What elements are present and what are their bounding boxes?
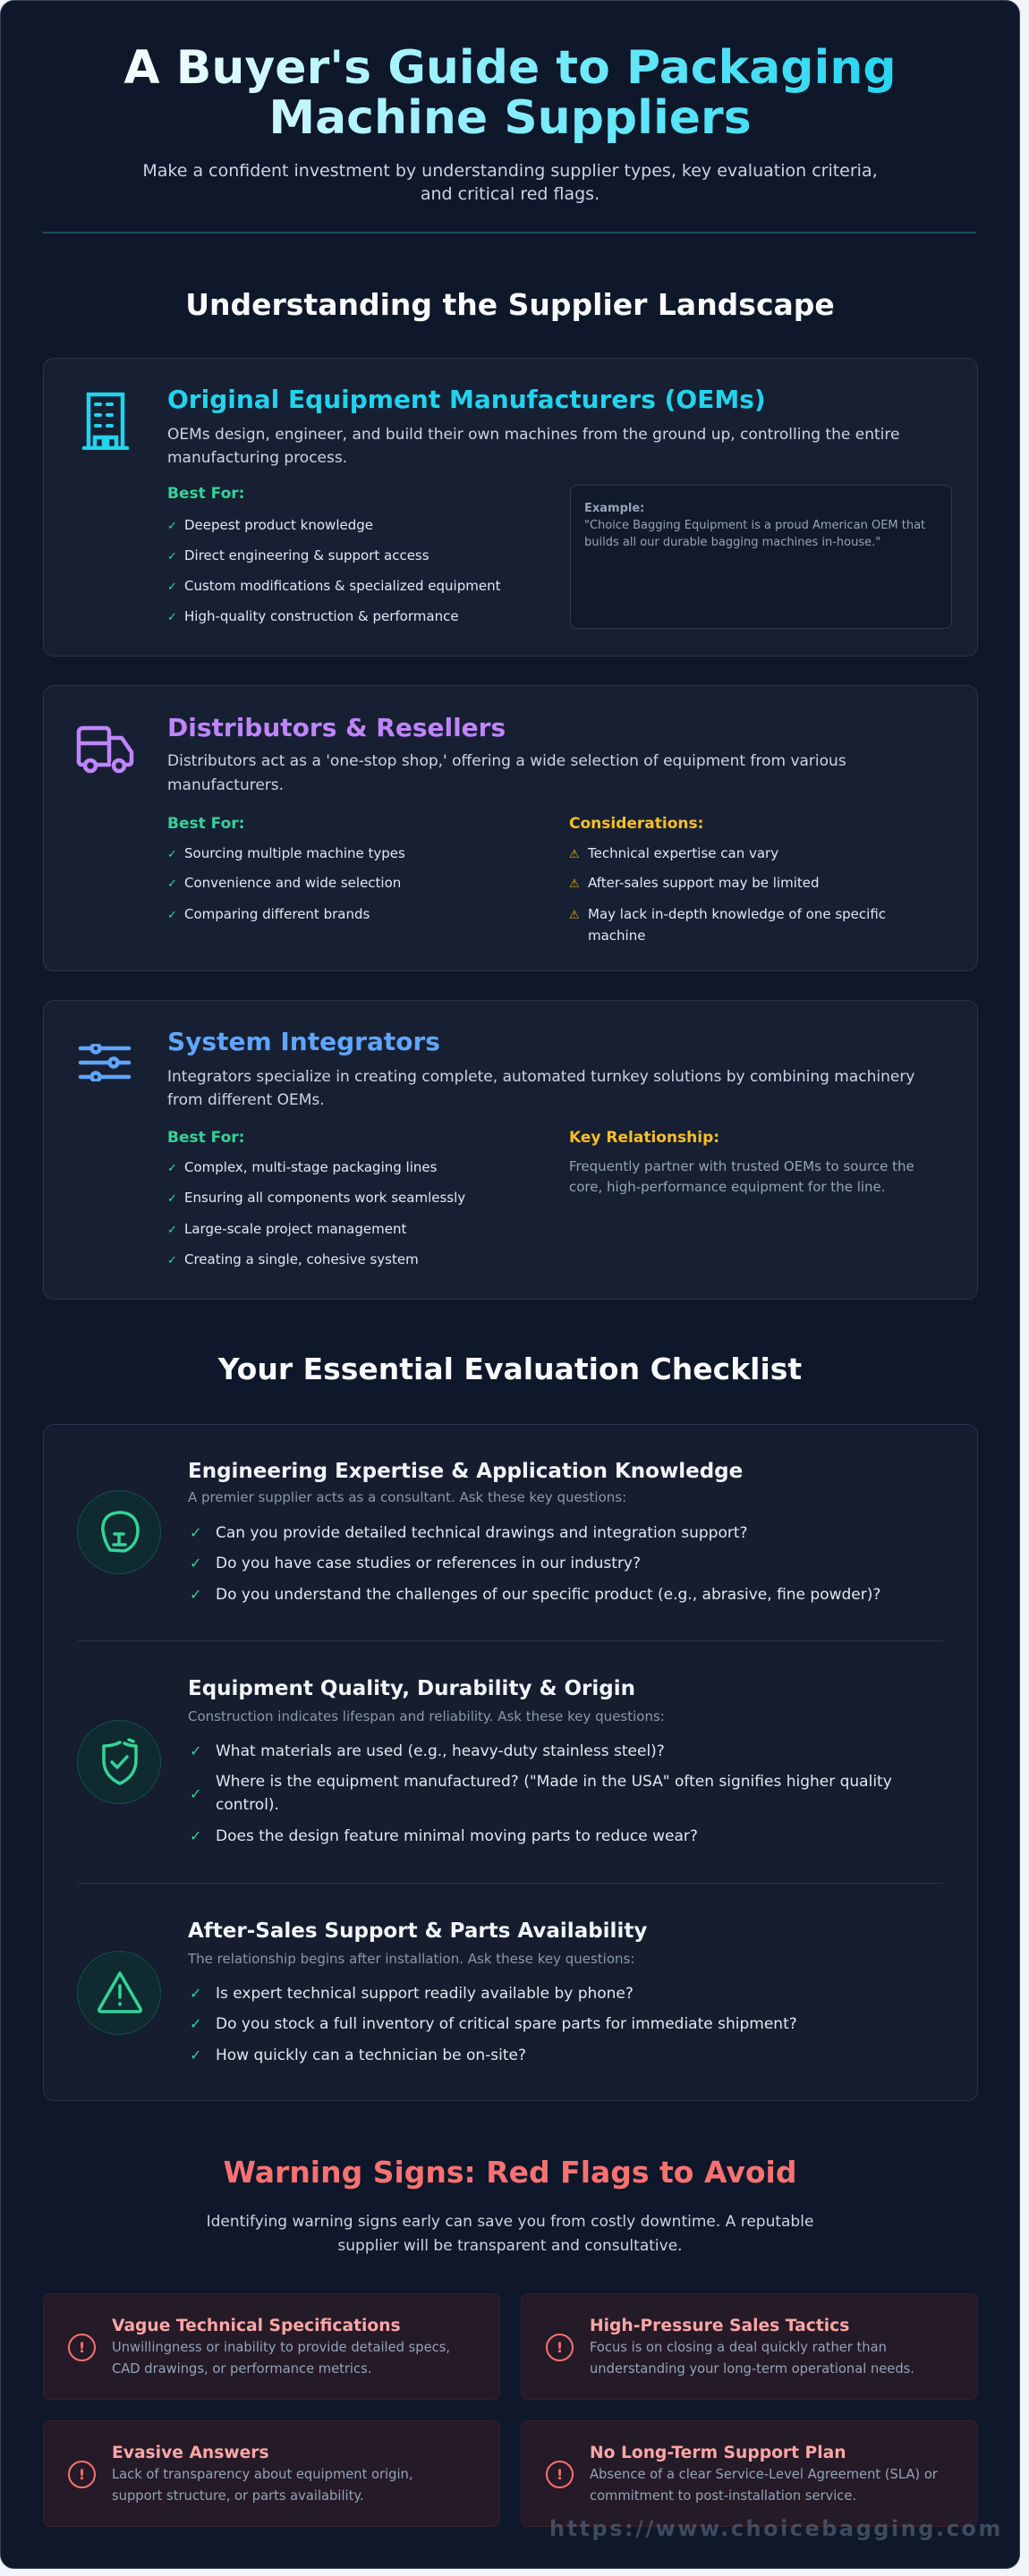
best for list: Custom modifications & specialized equipment: [184, 578, 500, 594]
best for list: High-quality construction & performance: [184, 608, 459, 624]
icon: shield check: [77, 1720, 161, 1804]
checklist item: quality: ✓: [190, 1827, 201, 1844]
icon: warning triangle: [77, 1951, 161, 2035]
best for list: ✓: [167, 1192, 177, 1206]
best for list: Direct engineering & support access: [184, 547, 429, 564]
best for list: ✓: [167, 909, 177, 922]
checklist item: quality: Construction indicates lifespan and reliability. Ask these key questions:: [188, 1708, 665, 1724]
red flag: vague specs: Unwillingness or inability to provide detailed specs,: [112, 2340, 450, 2355]
red flag: no support plan: commitment to post-installation service.: [590, 2488, 856, 2504]
best for list: ✓: [167, 848, 177, 861]
considerations list: May lack in-depth knowledge of one specific: [588, 906, 886, 922]
checklist item: engineering: ✓: [190, 1555, 201, 1572]
panel: checklist: [43, 1424, 978, 2101]
best for list: Comparing different brands: [184, 906, 370, 922]
red flag: vague specs: CAD drawings, or performance metrics.: [112, 2361, 371, 2377]
heading: supplier landscape: Understanding the Supplier Landscape: [185, 287, 835, 322]
best for list: ✓: [167, 520, 177, 533]
distributors title: Distributors & Resellers: [167, 713, 506, 742]
considerations list: machine: [588, 928, 645, 944]
OEM description: OEMs design, engineer, and build their own machines from the ground up, controlling the entire: [167, 426, 899, 444]
subtitle: Make a confident investment by understanding supplier types, key evaluation criteria,: [142, 161, 878, 181]
distributors description: [167, 752, 846, 794]
best for list: Deepest product knowledge: [184, 517, 373, 533]
red flag: evasive answers: support structure, or parts availability.: [112, 2488, 364, 2504]
best for list: Best For:: [167, 485, 244, 503]
distributors description: manufacturers.: [167, 776, 284, 794]
checklist item: engineering: A premier supplier acts as a consultant. Ask these key questions:: [188, 1489, 626, 1505]
checklist item: engineering: [77, 1460, 880, 1604]
best for list: ✓: [167, 1162, 177, 1175]
checklist item: after-sales: The relationship begins after installation. Ask these key questions:: [188, 1951, 634, 1967]
checklist item: quality: Equipment Quality, Durability & Origin: [188, 1677, 635, 1700]
best for list: [167, 485, 501, 624]
icon: building: [82, 392, 129, 450]
red flag: high pressure: High-Pressure Sales Tactics: [590, 2317, 849, 2335]
subtitle: and critical red flags.: [421, 184, 600, 204]
checklist item: after-sales: ✓: [190, 1985, 201, 2002]
checklist item: quality: What materials are used (e.g., heavy-duty stainless steel)?: [216, 1742, 665, 1760]
heading: warning signs: Warning Signs: Red Flags to Avoid: [224, 2155, 796, 2190]
key relationship: core, high-performance equipment for the line.: [569, 1179, 886, 1195]
considerations list: ⚠: [569, 877, 580, 891]
considerations list: After-sales support may be limited: [588, 875, 820, 891]
considerations list: ⚠: [569, 909, 580, 922]
OEM description: [167, 426, 899, 467]
checklist item: engineering: Do you understand the challenges of our specific product (e.g., abrasive, fine powder)?: [216, 1586, 880, 1604]
checklist item: engineering: Engineering Expertise & Application Knowledge: [188, 1460, 743, 1483]
considerations list: Technical expertise can vary: [588, 845, 778, 861]
title: Machine Suppliers: [268, 91, 752, 145]
warning intro text: supplier will be transparent and consultative.: [337, 2237, 683, 2255]
key relationship: [569, 1129, 914, 1195]
warning intro text: Identifying warning signs early can save you from costly downtime. A reputable: [207, 2213, 813, 2231]
integrators description: from different OEMs.: [167, 1091, 325, 1109]
red flag: high pressure: Focus is on closing a deal quickly rather than: [590, 2340, 887, 2355]
red flag: high pressure: understanding your long-term operational needs.: [590, 2361, 914, 2377]
best for list: ✓: [167, 611, 177, 624]
best for list: Sourcing multiple machine types: [184, 845, 405, 861]
considerations list: Considerations:: [569, 815, 703, 833]
checklist item: after-sales: How quickly can a technician be on-site?: [216, 2046, 526, 2064]
checklist item: engineering: Can you provide detailed technical drawings and integration support?: [216, 1524, 748, 1542]
considerations list: [569, 815, 886, 944]
callout: example: "Choice Bagging Equipment is a proud American OEM that: [584, 519, 925, 532]
integrators title: System Integrators: [167, 1027, 440, 1056]
OEM title: Original Equipment Manufacturers (OEMs): [167, 385, 766, 414]
key relationship: Frequently partner with trusted OEMs to source the: [569, 1158, 914, 1174]
watermark url: https://www.choicebagging.com: [549, 2516, 1003, 2541]
integrators description: [167, 1068, 914, 1109]
best for list: ✓: [167, 580, 177, 594]
checklist item: quality: ✓: [190, 1785, 201, 1802]
checklist item: quality: Where is the equipment manufactured? ("Made in the USA" often signifies higher quality: [216, 1773, 892, 1791]
icon: truck: [77, 726, 134, 773]
red flag: no support plan: [521, 2420, 978, 2527]
checklist item: after-sales: ✓: [190, 2015, 201, 2032]
checklist item: after-sales: [77, 1919, 797, 2064]
panel: distributors: [43, 685, 978, 971]
icon: lightbulb: [77, 1490, 161, 1574]
red flag: evasive answers: [43, 2420, 500, 2527]
checklist item: engineering: Do you have case studies or references in our industry?: [216, 1555, 641, 1572]
checklist item: engineering: ✓: [190, 1524, 201, 1541]
checklist item: after-sales: Is expert technical support readily available by phone?: [216, 1985, 634, 2003]
red flag: vague specs: !: [79, 2339, 85, 2356]
checklist item: after-sales: Do you stock a full inventory of critical spare parts for immediate shipment?: [216, 2015, 797, 2033]
best for list: Best For:: [167, 1129, 244, 1147]
best for list: Large-scale project management: [184, 1221, 406, 1237]
subtitle: [142, 161, 878, 204]
panel: OEMs: [43, 358, 978, 657]
best for list: Ensuring all components work seamlessly: [184, 1190, 465, 1206]
checklist item: quality: control).: [216, 1796, 279, 1814]
best for list: ✓: [167, 1254, 177, 1267]
best for list: ✓: [167, 550, 177, 564]
red flag: no support plan: !: [557, 2466, 563, 2483]
title: [0, 43, 1020, 143]
best for list: Convenience and wide selection: [184, 875, 401, 891]
panel: system integrators: [43, 1000, 978, 1300]
red flag: vague specs: Vague Technical Specifications: [112, 2317, 401, 2335]
checklist item: quality: Does the design feature minimal moving parts to reduce wear?: [216, 1827, 698, 1845]
checklist item: quality: ✓: [190, 1742, 201, 1759]
red flag: evasive answers: Lack of transparency about equipment origin,: [112, 2467, 413, 2482]
red flag: no support plan: Absence of a clear Service-Level Agreement (SLA) or: [590, 2467, 938, 2482]
title: A Buyer's Guide to Packaging: [123, 41, 897, 95]
callout: example: builds all our durable bagging machines in-house.": [584, 536, 880, 549]
red flag: no support plan: No Long-Term Support Plan: [590, 2444, 846, 2462]
checklist item: quality: [77, 1677, 892, 1845]
callout: example: Example:: [584, 502, 644, 515]
best for list: [167, 1129, 465, 1267]
red flag: high pressure: !: [557, 2339, 563, 2356]
callout: example: [570, 485, 952, 629]
best for list: [167, 815, 405, 922]
checklist item: after-sales: After-Sales Support & Parts Availability: [188, 1919, 647, 1943]
considerations list: ⚠: [569, 848, 580, 861]
best for list: Complex, multi-stage packaging lines: [184, 1159, 437, 1175]
best for list: Creating a single, cohesive system: [184, 1251, 419, 1267]
best for list: ✓: [167, 877, 177, 891]
integrators description: Integrators specialize in creating complete, automated turnkey solutions by combining machinery: [167, 1068, 914, 1086]
red flag: evasive answers: !: [79, 2466, 85, 2483]
best for list: ✓: [167, 1224, 177, 1237]
red flag: high pressure: [521, 2293, 978, 2400]
distributors description: Distributors act as a 'one-stop shop,' offering a wide selection of equipment from various: [167, 752, 846, 770]
OEM description: manufacturing process.: [167, 449, 347, 467]
checklist item: engineering: ✓: [190, 1586, 201, 1603]
heading: checklist: Your Essential Evaluation Checklist: [218, 1352, 802, 1386]
key relationship: Key Relationship:: [569, 1129, 719, 1147]
warning intro text: [207, 2213, 813, 2255]
red flag: evasive answers: Evasive Answers: [112, 2444, 269, 2462]
icon: sliders: [79, 1044, 131, 1081]
checklist item: after-sales: ✓: [190, 2046, 201, 2063]
best for list: Best For:: [167, 815, 244, 833]
red flag: vague specs: [43, 2293, 500, 2400]
